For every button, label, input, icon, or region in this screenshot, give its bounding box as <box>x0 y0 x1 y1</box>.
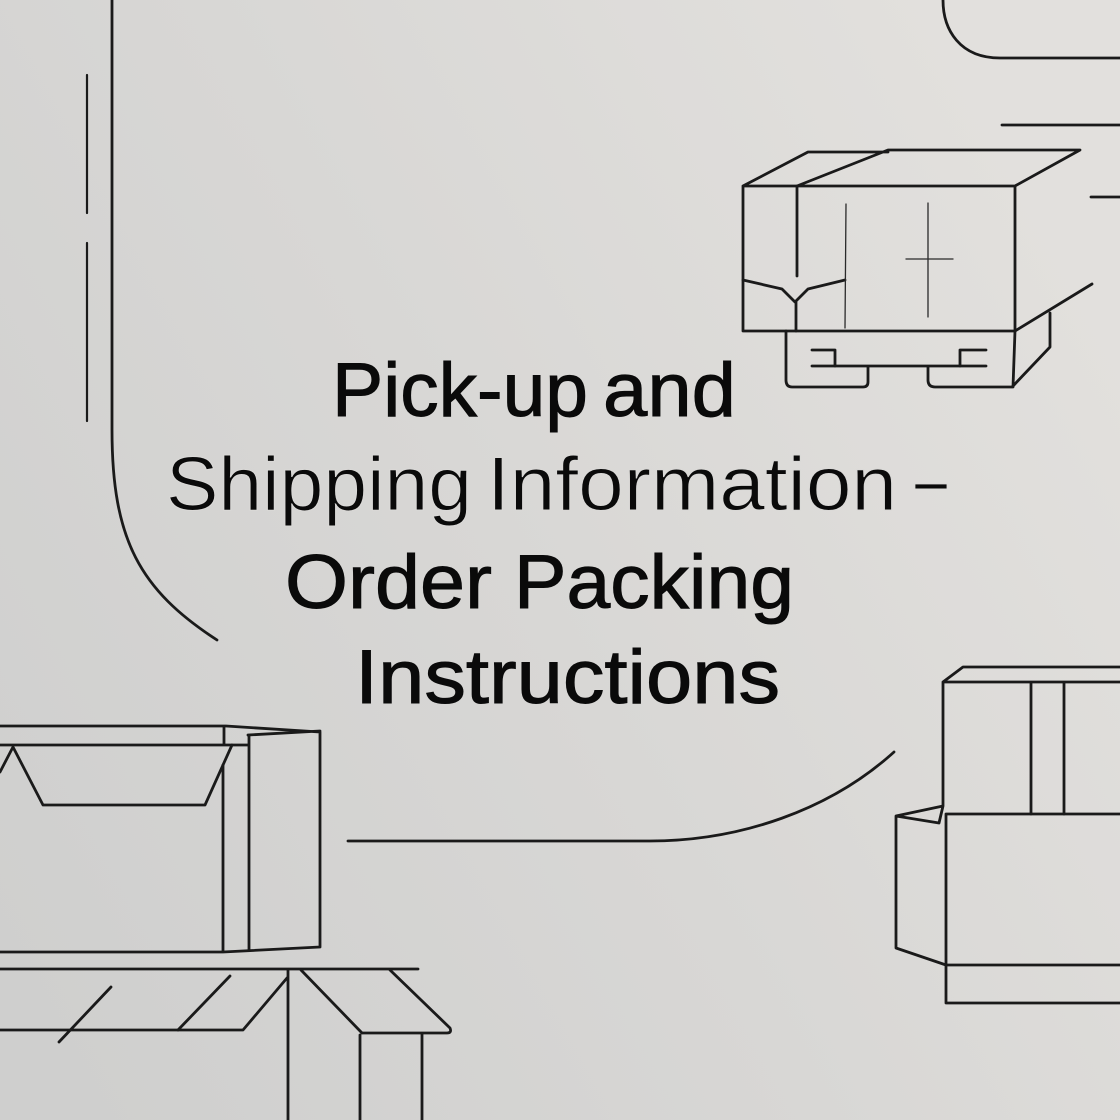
title line 4: Instructions <box>355 635 780 720</box>
title line 3 <box>285 540 794 625</box>
icon: closed shipping box on pallet <box>743 150 1092 387</box>
curved connector line <box>348 752 894 841</box>
title line 1 <box>332 348 736 433</box>
title line 2: – <box>915 438 948 523</box>
title <box>166 348 948 720</box>
title line 2: Information <box>487 442 897 527</box>
title line 2: Shipping <box>166 442 472 527</box>
icon: stacked boxes right <box>896 667 1120 1003</box>
icon: flattened box flaps bottom left <box>0 969 451 1120</box>
title line 3: Order <box>285 540 492 625</box>
title line 2 <box>166 438 948 527</box>
title line 1: and <box>603 348 736 433</box>
icon: open box bottom left <box>0 726 320 952</box>
decorative left guide line with curve <box>87 0 217 640</box>
title line 3: Packing <box>514 540 794 625</box>
top right speed lines <box>1002 125 1120 197</box>
title line 1: Pick-up <box>332 348 588 433</box>
top right corner rounded line <box>943 0 1120 58</box>
